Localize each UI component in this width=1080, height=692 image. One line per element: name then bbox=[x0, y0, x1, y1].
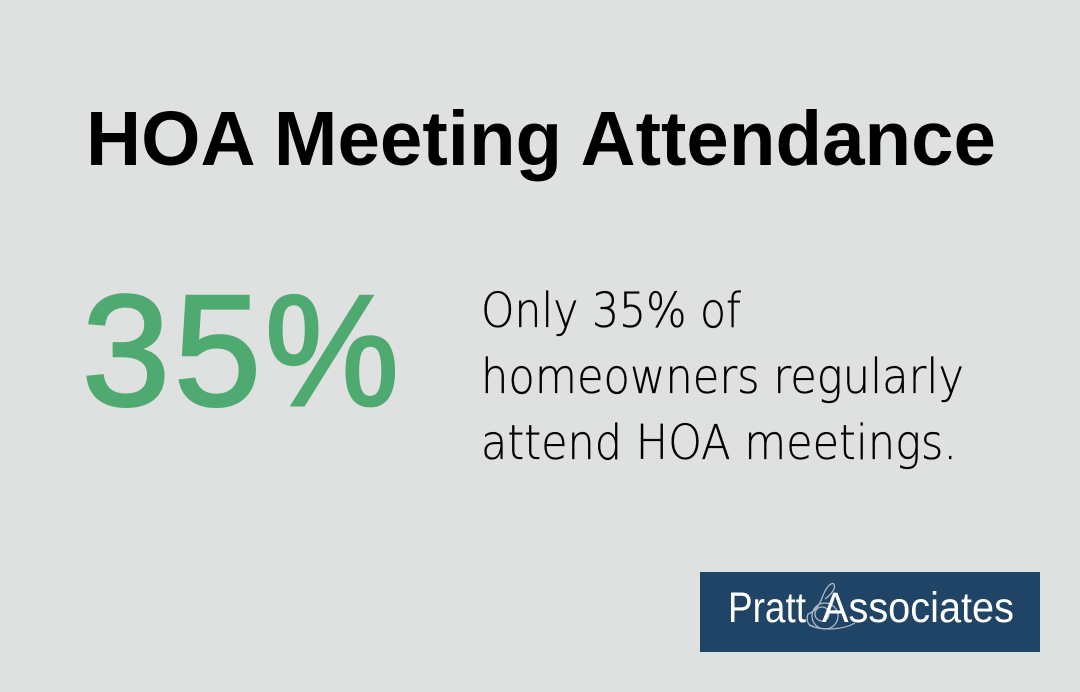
big statistic: 35%: 5 bbox=[174, 263, 261, 439]
logo ampersand flourish bbox=[807, 584, 855, 629]
statistic description: attend HOA meetings. bbox=[481, 415, 957, 471]
statistic description: homeowners regularly bbox=[481, 349, 964, 405]
logo wordmark: Associates: Associates bbox=[822, 584, 1014, 632]
logo wordmark: Pratt: Pratt bbox=[728, 584, 806, 632]
big statistic: 35%: 3 bbox=[82, 263, 170, 439]
statistic description bbox=[481, 283, 964, 471]
big statistic: 35%: % bbox=[265, 263, 399, 439]
logo: Pratt & Associates bbox=[700, 572, 1040, 652]
title: HOA Meeting Attendance bbox=[86, 96, 996, 182]
statistic description: Only 35% of bbox=[481, 283, 741, 339]
big statistic: 35% bbox=[82, 263, 399, 439]
